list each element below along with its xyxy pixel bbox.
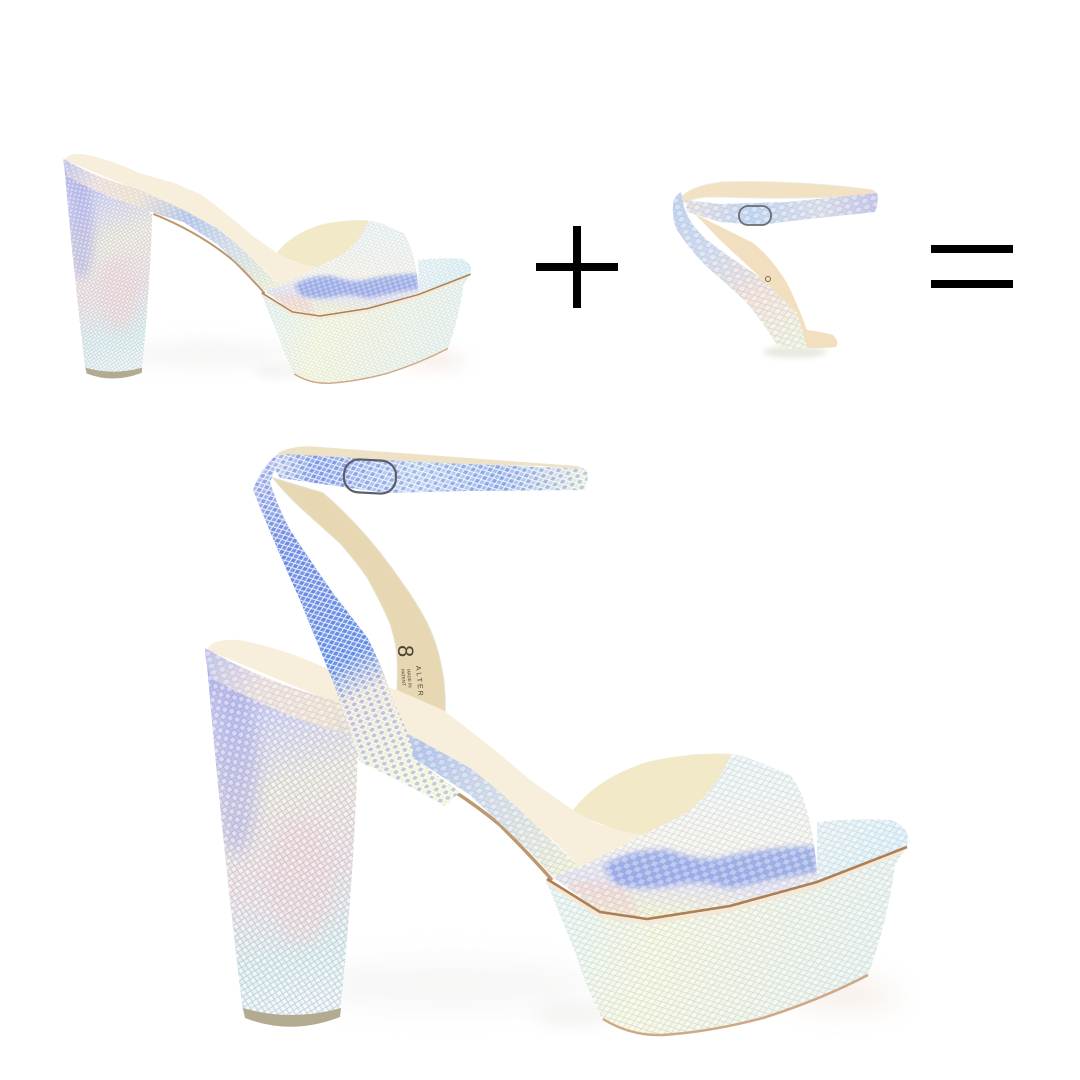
strap inner lining sliver bbox=[278, 446, 587, 470]
diagonal strap bbox=[253, 452, 460, 806]
mule body: large sandal base (reused for the small mule) bbox=[205, 640, 908, 1035]
large sandal ankle strap assembly bbox=[253, 446, 588, 806]
logo mark bbox=[766, 276, 770, 282]
strap lining bbox=[695, 214, 837, 348]
toe bbox=[817, 819, 908, 883]
collar and shank strip bbox=[205, 648, 580, 877]
ankle band bbox=[685, 193, 878, 225]
icon: size stamp and strap lining behind the sandal bbox=[273, 478, 445, 712]
strap inner top bbox=[679, 182, 878, 203]
shoe interior bbox=[573, 754, 731, 835]
icon: buckle bbox=[343, 459, 397, 494]
size mark text: PATENT bbox=[400, 669, 406, 686]
shadow bbox=[763, 346, 827, 358]
size mark text: 8 bbox=[393, 645, 418, 657]
icon: small buckle bbox=[739, 206, 771, 225]
sole edge under shank bbox=[360, 743, 552, 880]
insole bbox=[207, 640, 643, 867]
size mark text: MADE IN bbox=[406, 669, 413, 688]
heel tip bbox=[243, 1008, 341, 1027]
piping bbox=[547, 847, 907, 923]
small ankle strap accessory bbox=[673, 182, 878, 358]
vamp bbox=[553, 754, 818, 919]
platform sole line bbox=[603, 975, 868, 1035]
heel block bbox=[207, 665, 358, 1022]
ankle strap band bbox=[273, 454, 588, 493]
platform bbox=[545, 847, 907, 1035]
diagonal strap bbox=[673, 192, 807, 349]
plus sign bbox=[536, 226, 618, 308]
size mark text: ALTER bbox=[414, 666, 424, 698]
small mule shoe bbox=[63, 154, 471, 383]
size mark text bbox=[393, 645, 424, 698]
equals sign bbox=[931, 245, 1013, 288]
shadows under shoe bbox=[300, 959, 900, 1027]
